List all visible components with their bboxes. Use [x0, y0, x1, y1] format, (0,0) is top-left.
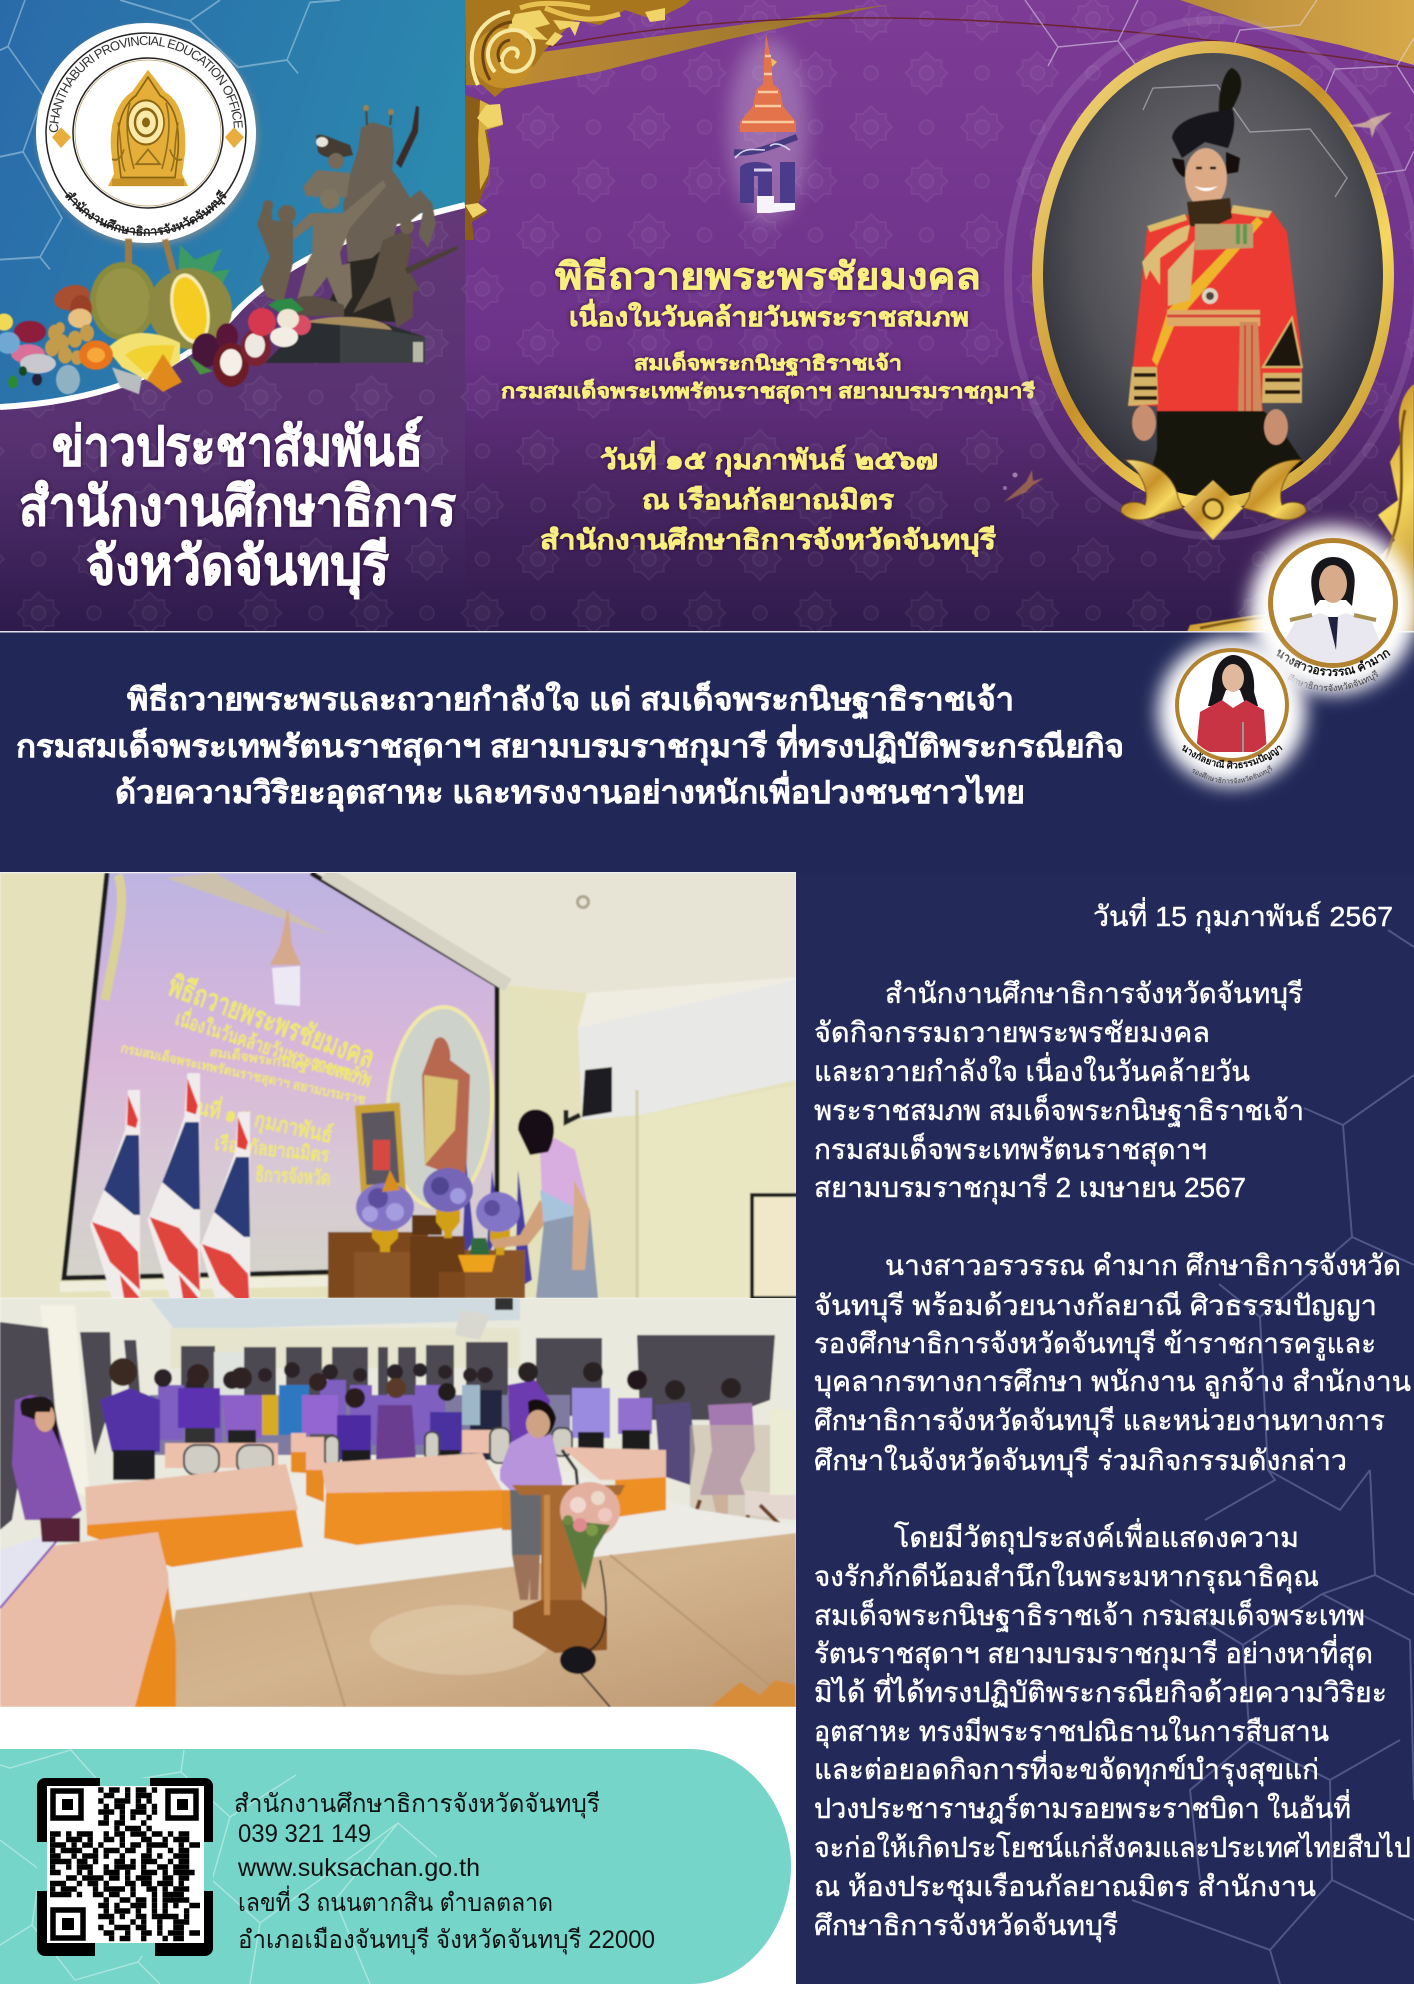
- text block: paragraph two: ศึกษาธิการจังหวัดจันทบุรี และหน่วยงานทางการ: [814, 1405, 1385, 1438]
- projected text: เนื่องในวันคล้ายวันพระราชสมภพ: [172, 1003, 376, 1092]
- speaker woman at podium: [500, 1432, 562, 1490]
- heading: main news headline: ด้วยความวิริยะอุตสาหะ และทรงงานอย่างหนักเพื่อปวงชนชาวไทย: [115, 770, 1025, 812]
- text block: paragraph three: สมเด็จพระกนิษฐาธิราชเจ้า กรมสมเด็จพระเทพ: [814, 1598, 1365, 1632]
- text block: paragraph two: รองศึกษาธิการจังหวัดจันทบุรี ข้าราชการครูและ: [814, 1328, 1376, 1361]
- meeting tables: [85, 1464, 298, 1528]
- beige floor: [160, 1533, 796, 1707]
- wooden altar tables: [328, 1232, 428, 1298]
- woman placing flowers: [490, 1200, 552, 1248]
- projected text: [119, 970, 379, 1190]
- profile: deputy education officer: นางกัลยาณี ศิวธรรมปัญญา: [1182, 745, 1282, 769]
- panel: right body text background: [796, 873, 1414, 1984]
- illustration: durian, fruits and gems: [0, 239, 271, 394]
- crown on screen: [270, 907, 301, 965]
- decoration: sparkle: [1003, 470, 1044, 502]
- projected text: ธิการจังหวัด: [255, 1164, 331, 1190]
- back row people: [150, 1362, 570, 1460]
- text block: paragraph three: โดยมีวัตถุประสงค์เพื่อแสดงความ: [894, 1518, 1299, 1555]
- back tables and chairs: [165, 1443, 278, 1468]
- text block: date: วันที่ 15 กุมภาพันธ์ 2567: [1093, 897, 1393, 934]
- text block: paragraph three: และต่อยอดกิจการที่จะขจัดทุกข์บำรุงสุขแก่: [814, 1750, 1319, 1787]
- contact details: เลขที่ 3 ถนนตากสิน ตำบลตลาด: [238, 1885, 553, 1917]
- heading: main news headline: กรมสมเด็จพระเทพรัตนราชสุดาฯ สยามบรมราชกุมารี ที่ทรงปฏิบัติพระกรณียกิจ: [16, 724, 1124, 766]
- contact details: อำเภอเมืองจันทบุรี จังหวัดจันทบุรี 22000: [238, 1926, 655, 1955]
- heading: gold ceremony title text: กรมสมเด็จพระเทพรัตนราชสุดาฯ สยามบรมราชกุมารี: [501, 378, 1035, 404]
- text block: paragraph one: สำนักงานศึกษาธิการจังหวัดจันทบุรี: [885, 978, 1303, 1011]
- panel: navy headline band: [0, 632, 1414, 873]
- panel: contact card: [0, 1749, 791, 1984]
- photo: staff standing in meeting room: [0, 1298, 796, 1707]
- text block: paragraph one: กรมสมเด็จพระเทพรัตนราชสุดาฯ: [814, 1132, 1207, 1167]
- contact details: [234, 1790, 655, 1955]
- text block: paragraph two: นางสาวอรวรรณ คำมาก ศึกษาธิการจังหวัด: [885, 1250, 1401, 1281]
- text block: paragraph two: จันทบุรี พร้อมด้วยนางกัลยาณี ศิวธรรมปัญญา: [814, 1290, 1377, 1323]
- heading: gold ceremony title text: [501, 256, 1035, 557]
- icon: gold dharma wheel emblem: [52, 70, 244, 186]
- photo: blessing ceremony in front of screen: [0, 873, 802, 1320]
- contact details: 039 321 149: [238, 1820, 371, 1848]
- contact details: สำนักงานศึกษาธิการจังหวัดจันทบุรี: [234, 1790, 600, 1819]
- ornament: gold side scroll, bottom right: [1187, 384, 1414, 632]
- projection screen: [64, 873, 497, 1278]
- line: white top edge of photos: [0, 872, 796, 874]
- ornament: gold corner scroll: [465, 0, 690, 240]
- speaker: [582, 1067, 612, 1117]
- text block: paragraph three: รัตนราชสุดาฯ สยามบรมราชกุมารี อย่างหาที่สุด: [814, 1634, 1373, 1671]
- panel: left header with logo: [0, 0, 465, 632]
- logo: provincial education office seal: CHANTHABURI PROVINCIAL EDUCATION OFFICE: [49, 36, 243, 132]
- projected portrait: [383, 1004, 497, 1210]
- heading: public relations title: จังหวัดจันทบุรี: [86, 536, 389, 600]
- side tables: [291, 1433, 306, 1472]
- figure: uniformed portrait: [1128, 68, 1318, 510]
- woman at left: [12, 1395, 82, 1542]
- thai flags: [90, 1090, 140, 1298]
- text block: paragraph three: ณ ห้องประชุมเรือนกัลยาณมิตร สำนักงาน: [814, 1871, 1316, 1904]
- text block: paragraph one: สยามบรมราชกุมารี 2 เมษายน 2567: [814, 1172, 1246, 1205]
- decorated chairs: [690, 1425, 772, 1530]
- heading: main news headline: [16, 680, 1124, 812]
- foreground table: [0, 1532, 176, 1707]
- projected text: วันที่ ๑๕ กุมภาพันธ์: [185, 1089, 336, 1150]
- illustration: plinth and rambutan: [248, 298, 425, 363]
- illustration: King Taksin statue on plinth: [257, 105, 458, 328]
- curtains: [0, 1322, 775, 1530]
- text block: paragraph three: [814, 1518, 1411, 1943]
- text block: paragraph three: อุตสาหะ ทรงมีพระราชปณิธานในการสืบสาน: [814, 1715, 1329, 1749]
- heading: gold ceremony title text: พิธีถวายพระพรชัยมงคล: [555, 256, 981, 297]
- text block: paragraph one: [814, 978, 1304, 1205]
- profile: education officer: ศึกษาธิการจังหวัดจันทบุรี: [1288, 670, 1378, 692]
- text block: paragraph three: ศึกษาธิการจังหวัดจันทบุรี: [814, 1910, 1118, 1943]
- podium flowers: [560, 1482, 620, 1538]
- heading: public relations title: [19, 416, 456, 600]
- text block: paragraph three: จงรักภักดีน้อมสำนึกในพระมหากรุณาธิคุณ: [814, 1560, 1319, 1594]
- line: white divider under header: [0, 631, 1414, 632]
- portrait: Princess in gold oval frame: [1008, 20, 1414, 540]
- panel: right header purple: [465, 0, 1414, 632]
- heading: main news headline: พิธีถวายพระพรและถวายกำลังใจ แด่ สมเด็จพระกนิษฐาธิราชเจ้า: [127, 680, 1014, 720]
- framed picture: [355, 1103, 406, 1195]
- profile: education officer: นางสาวอรวรรณ คำมาก: [1276, 649, 1390, 676]
- profile: deputy education officer: รองศึกษาธิการจังหวัดจันทบุรี: [1192, 765, 1272, 784]
- heading: public relations title: สำนักงานศึกษาธิการ: [19, 477, 456, 537]
- heading: gold ceremony title text: สำนักงานศึกษาธิการจังหวัดจันทบุรี: [540, 525, 997, 557]
- heading: gold ceremony title text: วันที่ ๑๕ กุมภาพันธ์ ๒๕๖๗: [600, 440, 938, 477]
- blue flags: [462, 1160, 532, 1290]
- ornament: gold kanok at bottom of frame: [1121, 460, 1306, 540]
- podium: [512, 1485, 625, 1620]
- projected text: กรมสมเด็จพระเทพรัตนราชสุดาฯ สยามบรมราช: [119, 1038, 368, 1108]
- flowers and vases: [356, 1168, 520, 1272]
- decoration: hexagon lines on text panel: [1132, 930, 1414, 1984]
- white tile floor: [165, 1470, 796, 1610]
- door: [752, 1195, 802, 1298]
- text block: paragraph three: ปวงประชาราษฎร์ตามรอยพระราชบิดา ในอันที่: [814, 1789, 1351, 1824]
- heading: gold ceremony title text: เนื่องในวันคล้ายวันพระราชสมภพ: [569, 298, 969, 332]
- text block: paragraph two: บุคลากรทางการศึกษา พนักงาน ลูกจ้าง สำนักงาน: [814, 1366, 1411, 1399]
- QR code: [37, 1778, 213, 1956]
- text block: paragraph two: ศึกษาในจังหวัดจันทบุรี ร่วมกิจกรรมดังกล่าว: [814, 1444, 1347, 1478]
- decoration: gold ribbons: [504, 0, 1414, 175]
- heading: gold ceremony title text: สมเด็จพระกนิษฐาธิราชเจ้า: [634, 350, 902, 377]
- emblem: royal crown and monogram: [728, 34, 808, 222]
- text block: paragraph one: และถวายกำลังใจ เนื่องในวันคล้ายวัน: [814, 1052, 1250, 1087]
- contact details: www.suksachan.go.th: [237, 1854, 480, 1882]
- projected text: สมเด็จพระกนิษฐาธิราชเจ้า: [208, 1042, 369, 1083]
- heading: public relations title: ข่าวประชาสัมพันธ์: [52, 416, 423, 477]
- profile: deputy education officer: [1143, 623, 1321, 801]
- text block: paragraph two: [814, 1250, 1411, 1478]
- profile: education officer: [1234, 511, 1414, 709]
- heading: gold ceremony title text: ณ เรือนกัลยาณมิตร: [642, 485, 895, 515]
- projected text: เรือนกัลยาณมิตร: [213, 1132, 330, 1167]
- text block: paragraph three: มิได้ ที่ได้ทรงปฏิบัติพระกรณียกิจด้วยความวิริยะ: [814, 1673, 1387, 1708]
- text block: paragraph one: จัดกิจกรรมถวายพระพรชัยมงคล: [814, 1017, 1210, 1048]
- logo: provincial education office seal: สำนักงานศึกษาธิการจังหวัดจันทบุรี: [65, 189, 226, 236]
- projected text: พิธีถวายพระพรชัยมงคล: [164, 970, 379, 1075]
- text block: paragraph one: พระราชสมภพ สมเด็จพระกนิษฐาธิราชเจ้า: [814, 1093, 1304, 1127]
- ceiling: [311, 873, 796, 993]
- front row people: [100, 1358, 755, 1522]
- logo: provincial education office seal: [34, 22, 262, 250]
